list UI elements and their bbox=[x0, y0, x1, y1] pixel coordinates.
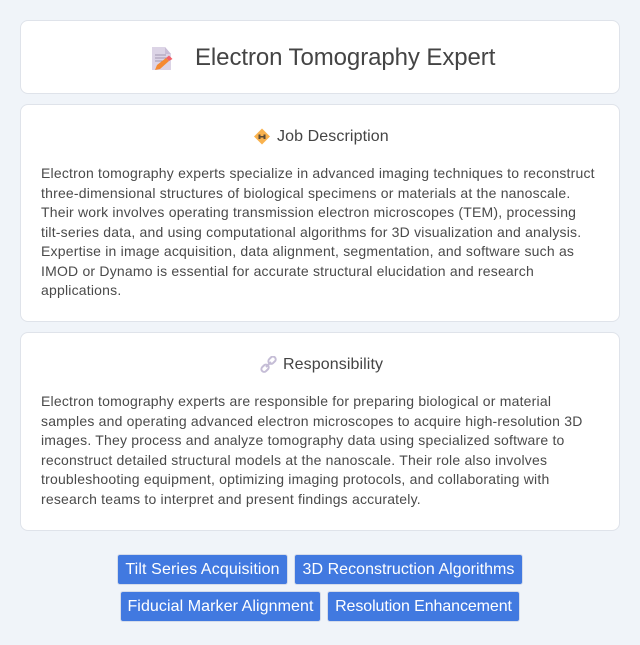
title: Electron Tomography Expert bbox=[195, 44, 495, 71]
heading: responsibility: Responsibility bbox=[283, 356, 383, 373]
text block: responsibility: reconstruct detailed structural models at the nanoscale. Their role also involves bbox=[41, 452, 547, 468]
text block: responsibility: research teams to interpret and present findings accurately. bbox=[41, 491, 421, 507]
text block: job description: tilt-series data, and using computational algorithms for 3D visualization and analysis. bbox=[41, 224, 581, 240]
text block: job description: Electron tomography experts specialize in advanced imaging techniques to reconstruct bbox=[41, 165, 595, 181]
text block: job description bbox=[41, 165, 595, 298]
text block: job description: Expertise in image acquisition, data alignment, segmentation, and software such as bbox=[41, 243, 574, 259]
tag: resolution enhancement: Resolution Enhancement bbox=[335, 598, 512, 615]
heading: job description: Job Description bbox=[277, 128, 389, 145]
text block: job description: three-dimensional structures of biological specimens or materials at the nanoscale. bbox=[41, 185, 570, 201]
tag: 3D reconstruction algorithms: 3D Reconstruction Algorithms bbox=[303, 561, 514, 578]
panel: title bbox=[20, 20, 620, 94]
tag: tilt series acquisition bbox=[117, 554, 288, 585]
tag: resolution enhancement bbox=[327, 591, 520, 622]
text block: responsibility: troubleshooting equipment, optimizing imaging protocols, and collaborating with bbox=[41, 471, 549, 487]
icon: document with pencil bbox=[152, 47, 172, 70]
text block: job description: Their work involves operating transmission electron microscopes (TEM), processing bbox=[41, 204, 576, 220]
icon: chain link bbox=[260, 356, 277, 373]
icon: job description diamond bbox=[254, 128, 270, 144]
tag: fiducial marker alignment bbox=[120, 591, 321, 622]
panel: job description bbox=[20, 104, 620, 322]
text block: responsibility: images. They process and analyze tomography data using specialized software to bbox=[41, 432, 565, 448]
text block: job description: applications. bbox=[41, 282, 121, 298]
tag: tilt series acquisition: Tilt Series Acquisition bbox=[125, 561, 280, 578]
tag: fiducial marker alignment: Fiducial Marker Alignment bbox=[127, 598, 314, 615]
text block: job description: IMOD or Dynamo is essential for accurate structural elucidation and research bbox=[41, 263, 534, 279]
panel: responsibility bbox=[20, 332, 620, 531]
tag: 3D reconstruction algorithms bbox=[294, 554, 523, 585]
text block: responsibility: samples and operating advanced electron microscopes to acquire high-resolution 3D bbox=[41, 413, 583, 429]
text block: responsibility: Electron tomography experts are responsible for preparing biological or material bbox=[41, 393, 551, 409]
